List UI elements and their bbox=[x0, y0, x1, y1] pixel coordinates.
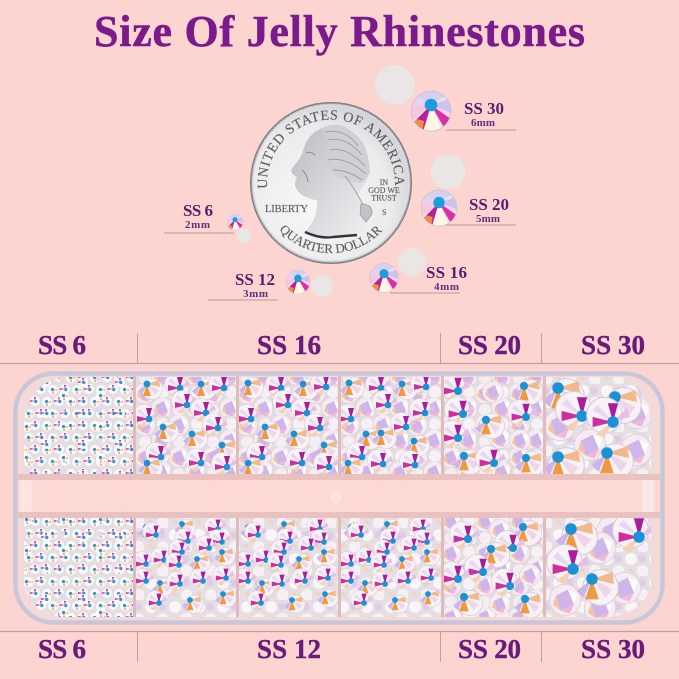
size sample: SS 6: SS 6 bbox=[183, 201, 213, 220]
size sample: SS 30: 6mm bbox=[471, 117, 495, 129]
bottom row compartment: SS 12 first bbox=[133, 517, 236, 617]
top row compartment: SS 16 third bbox=[341, 377, 441, 474]
size sample: SS 16: 4mm bbox=[434, 281, 459, 293]
centre bar of tray bbox=[18, 474, 660, 518]
bottom row compartment: SS 12 second bbox=[235, 517, 338, 617]
top size headers: SS 30 bbox=[581, 330, 645, 360]
top row compartment: SS 30 bbox=[546, 377, 651, 474]
bottom row compartment: SS 20 bbox=[439, 518, 544, 618]
top size headers bbox=[0, 330, 679, 364]
size sample: SS 30: SS 30 bbox=[464, 99, 504, 118]
size sample: SS 30 bbox=[375, 65, 516, 135]
bottom size headers: SS 12 bbox=[257, 634, 321, 664]
size sample: SS 6: 2mm bbox=[185, 219, 210, 231]
top size headers: SS 16 bbox=[257, 330, 321, 360]
bottom size headers bbox=[0, 632, 679, 664]
size sample: SS 16 bbox=[366, 248, 467, 295]
size sample: SS 20: SS 20 bbox=[469, 195, 509, 214]
rhinestone storage tray bbox=[16, 372, 662, 624]
coin legend bottom: QUARTER DOLLAR bbox=[280, 226, 382, 254]
top row compartment: SS 16 first bbox=[136, 377, 236, 474]
size sample: SS 12: 3mm bbox=[243, 288, 268, 300]
size sample: SS 20: 5mm bbox=[476, 213, 500, 225]
top size headers: SS 20 bbox=[458, 330, 521, 360]
bottom row compartment: SS 6 bbox=[24, 518, 133, 617]
coin text: Liberty: LIBERTY bbox=[265, 204, 308, 215]
coin motto bbox=[368, 178, 400, 202]
portrait of Washington bbox=[291, 125, 372, 237]
coin mint mark: S bbox=[382, 208, 386, 217]
bottom size headers: SS 20 bbox=[458, 634, 521, 664]
size sample: SS 6 bbox=[164, 201, 252, 244]
title: Size Of Jelly Rhinestones bbox=[94, 7, 585, 56]
top size headers: SS 6 bbox=[38, 330, 86, 360]
top row compartment: SS 16 second bbox=[239, 377, 338, 474]
icon: quarter dollar coin bbox=[250, 102, 412, 264]
bottom row compartment: SS 30 bbox=[546, 518, 651, 617]
size sample: SS 20 bbox=[416, 154, 516, 230]
size sample: SS 12: SS 12 bbox=[235, 270, 275, 289]
bottom row compartment: SS 12 third bbox=[338, 517, 441, 617]
top row compartment: SS 20 bbox=[444, 377, 543, 474]
size sample: SS 16: SS 16 bbox=[426, 263, 467, 282]
coin legend top: UNITED STATES OF AMERICA bbox=[258, 110, 404, 188]
bottom size headers: SS 6 bbox=[38, 634, 86, 664]
coin motto: GOD WE bbox=[368, 186, 400, 195]
top row compartment: SS 6 bbox=[24, 377, 133, 474]
bottom size headers: SS 30 bbox=[581, 634, 645, 664]
size sample: SS 12 bbox=[208, 270, 333, 300]
coin motto: IN bbox=[380, 178, 388, 187]
coin motto: TRUST bbox=[371, 194, 397, 202]
